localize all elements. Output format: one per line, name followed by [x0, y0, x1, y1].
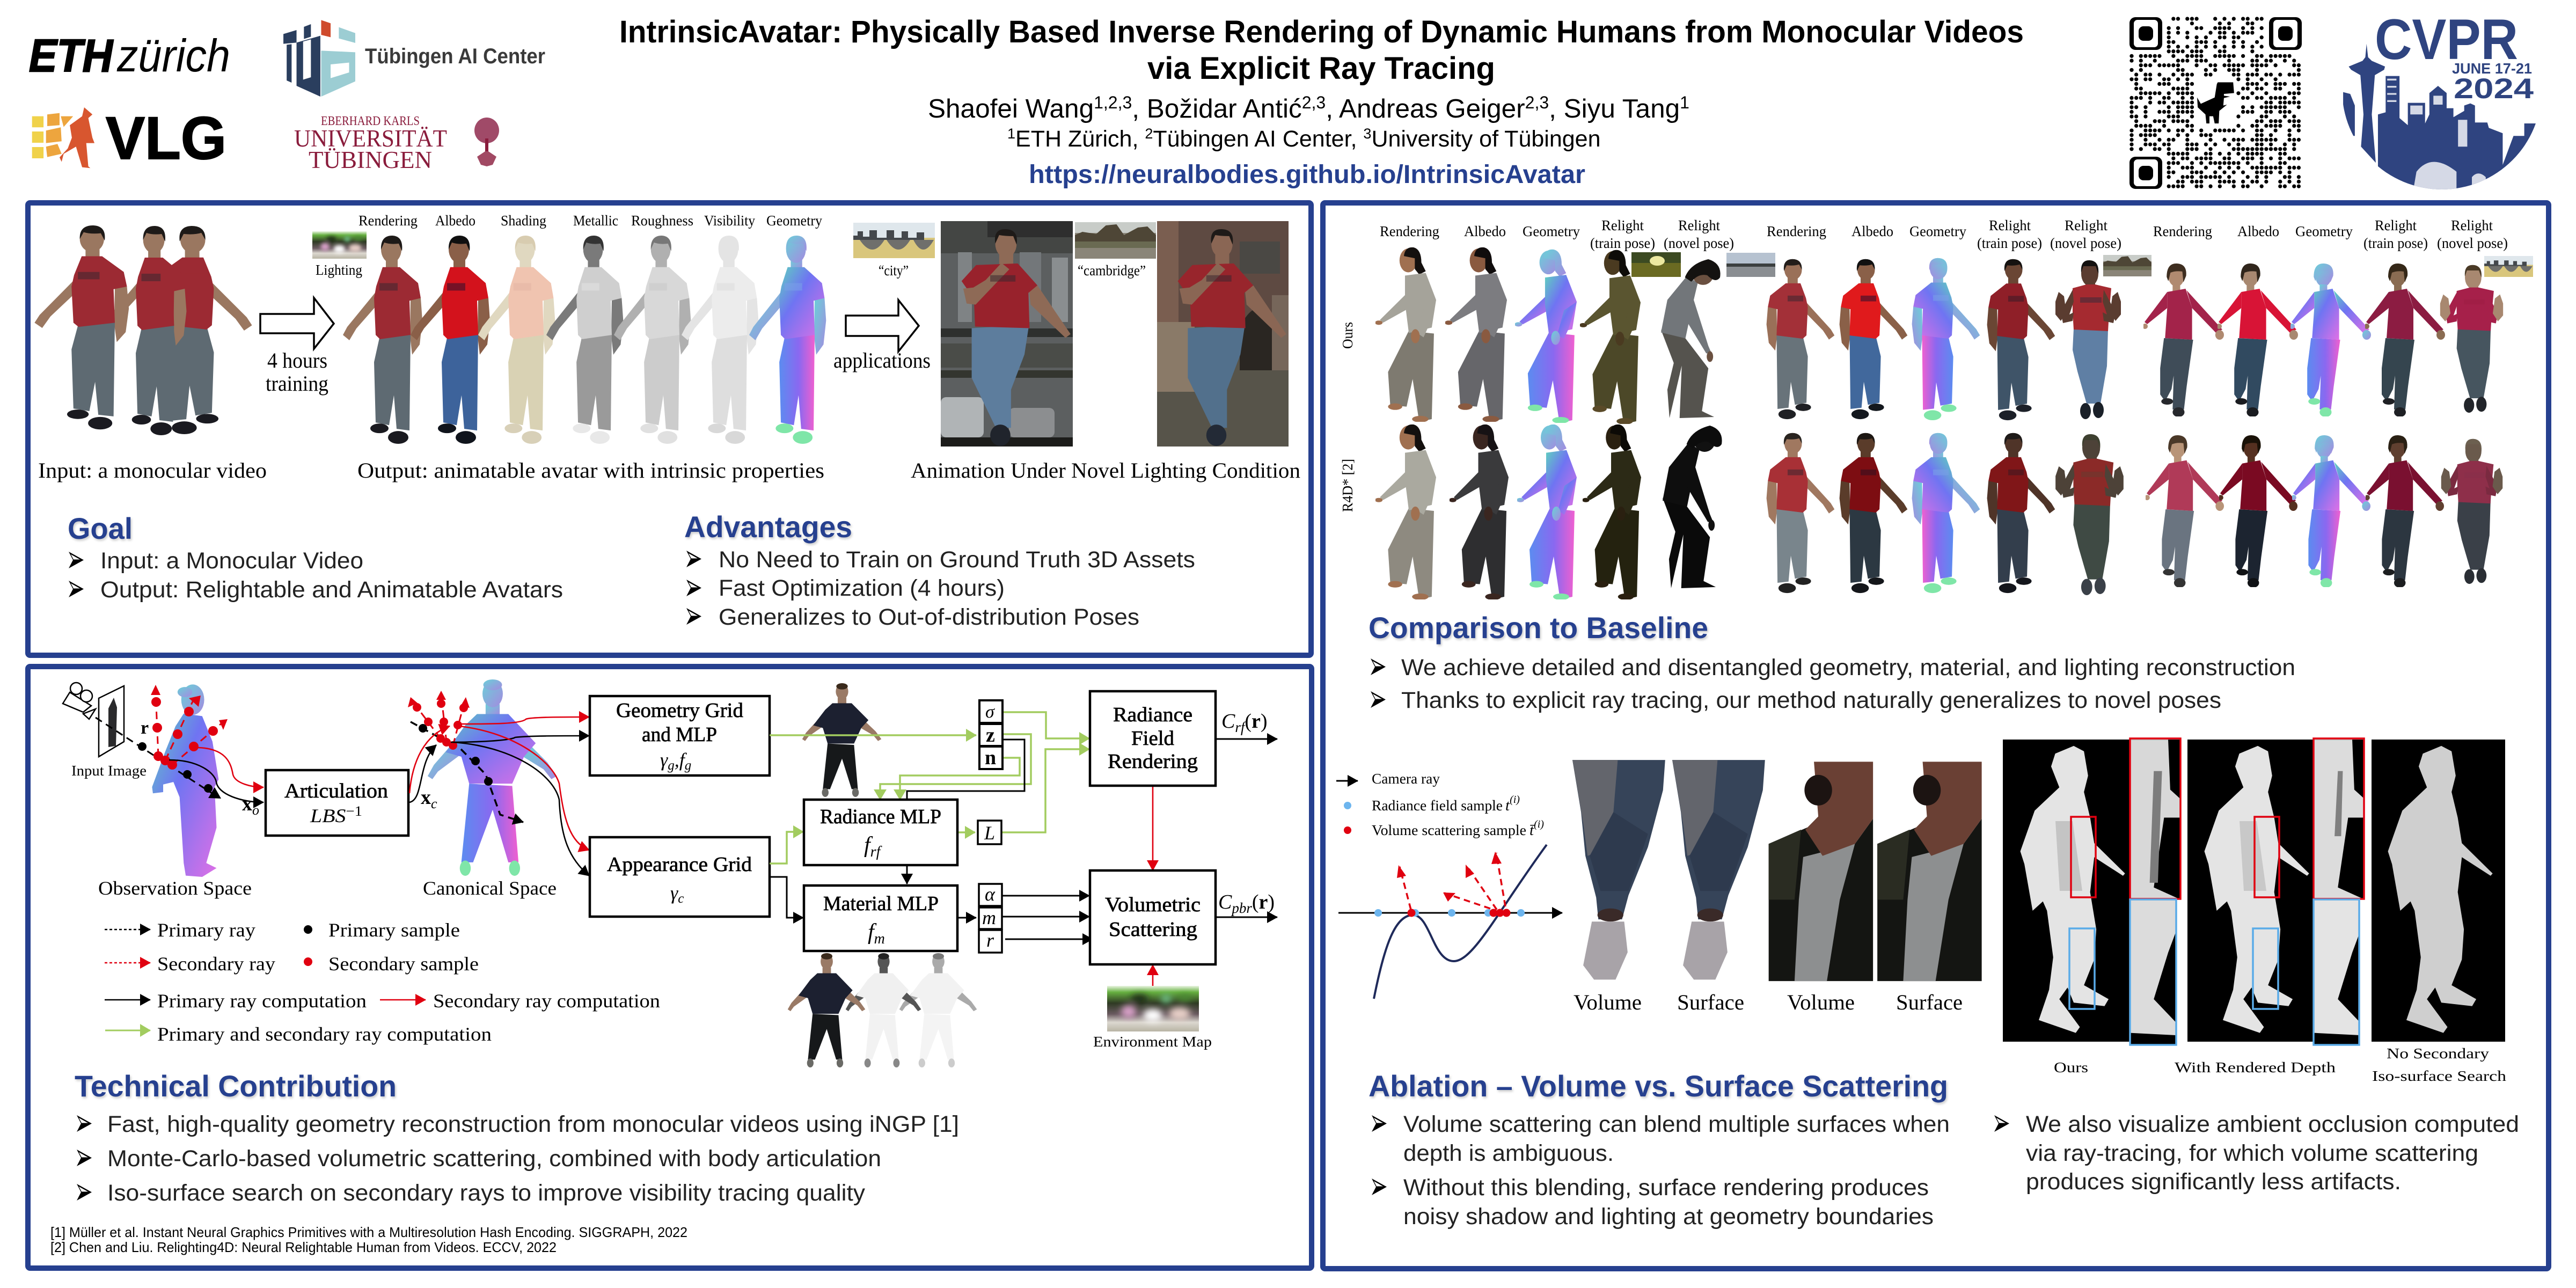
panel: comparison and ablation	[1323, 203, 2549, 1269]
box: geometry grid: Geometry Grid	[616, 699, 743, 722]
comparison column labels: (novel pose)	[1664, 235, 1734, 251]
output symbols: alpha m r	[979, 883, 1002, 953]
box: volumetric scattering	[1090, 870, 1216, 964]
ambient occlusion labels: No Secondary	[2387, 1045, 2490, 1062]
comparison column labels: Albedo	[2237, 223, 2279, 239]
comparison row 1: woman	[1375, 247, 1721, 425]
env map: cambridge small	[2103, 255, 2151, 276]
ambient occlusion labels: Iso-surface Search	[2372, 1068, 2507, 1084]
r label: r	[141, 718, 149, 738]
title	[619, 14, 2024, 86]
x_o label: x	[242, 793, 252, 815]
project url: https://neuralbodies.github.io/IntrinsicAvatar	[1029, 160, 1585, 189]
box: appearance grid	[590, 837, 770, 917]
lighting map: Lighting	[316, 262, 362, 278]
box: articulation	[266, 770, 408, 836]
box: radiance field rendering	[1090, 691, 1216, 786]
advantages bullets: Generalizes to Out-of-distribution Poses	[719, 604, 1139, 630]
panel: overview	[28, 203, 1311, 655]
image labels: volume surface: Surface	[1896, 990, 1963, 1014]
images: legs volume and surface	[1572, 760, 1765, 979]
environment map: Environment Map	[1093, 1034, 1212, 1050]
output label: C pbr: (	[1252, 891, 1259, 913]
comparison row 2: girl	[2145, 435, 2502, 588]
arrow: applications	[846, 300, 919, 352]
volume scattering diagram	[1338, 845, 1562, 999]
property column labels	[358, 213, 822, 229]
output symbol: L	[978, 821, 1001, 844]
affiliations: Tübingen AI Center,	[1153, 126, 1363, 152]
box: radiance mlp: f	[864, 833, 870, 858]
env maps: forest and lake	[1631, 252, 1775, 277]
technical bullets: Monte-Carlo-based volumetric scattering, combined with body articulation	[107, 1146, 881, 1172]
row label: R4D: R4D* [2]	[1340, 459, 1356, 512]
technical bullets: Iso-surface search on secondary rays to improve visibility tracing quality	[107, 1180, 866, 1206]
comparison column labels: (novel pose)	[2050, 235, 2121, 251]
logo: ETH Zurich	[29, 31, 230, 82]
box: geometry grid: ,	[675, 749, 679, 771]
comparison row 1: girl	[2142, 264, 2503, 417]
affiliations: 2	[1145, 126, 1153, 142]
goal bullets: Output: Relightable and Animatable Avatars	[100, 577, 563, 603]
box: geometry grid: and MLP	[642, 723, 717, 746]
authors: 2,3	[1302, 93, 1326, 112]
figure: geometry output	[802, 683, 881, 797]
legend: Primary ray	[157, 919, 255, 941]
input image label: Input Image	[71, 763, 147, 779]
comparison column labels: Rendering	[2153, 223, 2212, 239]
box: material mlp: f	[868, 920, 874, 945]
sampling legend: Radiance field sample	[1372, 797, 1503, 814]
box: articulation: Articulation	[284, 780, 388, 802]
output label: C pbr: r)	[1259, 891, 1275, 913]
input video figures	[34, 225, 252, 435]
property column labels: Roughness	[631, 213, 693, 229]
row label: ours: Ours	[1340, 322, 1356, 349]
observation space figure	[96, 684, 228, 877]
output symbols: alpha m r: α	[985, 883, 996, 905]
title: IntrinsicAvatar: Physically Based Inverse Rendering of Dynamic Humans from Monocular Videos	[619, 14, 2024, 49]
comparison column labels: Relight	[2375, 217, 2417, 233]
technical bullets	[77, 1111, 959, 1206]
box: material mlp	[804, 885, 957, 951]
authors: 2,3	[1525, 93, 1549, 112]
heading: goal: Goal	[68, 511, 133, 545]
photo: relit avatar cambridge	[1157, 221, 1289, 447]
output label: C rf: (	[1245, 710, 1252, 733]
legend: Secondary sample	[328, 953, 479, 975]
box: geometry grid: γ	[660, 749, 668, 771]
output label: C rf: rf	[1235, 719, 1247, 735]
comparison column labels: Geometry	[1909, 223, 1966, 239]
sampling legend: Camera ray	[1372, 771, 1440, 787]
env map: city small	[2484, 256, 2533, 277]
box: radiance mlp: rf	[870, 844, 882, 860]
logo: ETH Zurich: zürich	[116, 31, 230, 82]
box: volumetric scattering: Volumetric	[1105, 894, 1201, 916]
property column labels: Geometry	[766, 213, 822, 229]
ablation bullets right: We also visualize ambient occlusion computed	[2026, 1111, 2519, 1137]
output label: C pbr: pbr	[1231, 900, 1252, 916]
logo: VLG	[32, 105, 226, 172]
output label: C rf: r)	[1252, 710, 1268, 733]
green and black connector lines	[770, 712, 1277, 986]
ablation bullets right: produces significantly less artifacts.	[2026, 1169, 2401, 1195]
property column labels: Visibility	[704, 213, 755, 229]
box: material mlp: Material MLP	[823, 892, 939, 915]
image labels: volume surface: Volume	[1574, 990, 1642, 1014]
observation space label: Observation Space	[98, 877, 252, 899]
heading: advantages: Advantages	[684, 510, 852, 544]
lighting caption: Animation Under Novel Lighting Condition	[911, 458, 1300, 482]
comparison column labels: Relight	[1601, 217, 1644, 233]
canonical space label: Canonical Space	[423, 877, 557, 899]
material output figures	[788, 953, 977, 1067]
images: torso volume and surface	[1769, 762, 1982, 981]
image labels: volume surface: Surface	[1677, 990, 1744, 1014]
comparison column labels	[1380, 217, 2508, 251]
env map: city: “city”	[879, 262, 909, 279]
affiliations: 3	[1363, 126, 1371, 142]
training label: 4 hours	[267, 348, 327, 372]
property column labels: Shading	[501, 213, 546, 229]
logo: ETH Zurich: ETH	[29, 31, 113, 82]
comparison column labels: Rendering	[1380, 223, 1439, 239]
image labels: volume surface	[1574, 990, 1963, 1014]
box: articulation: −1	[346, 803, 362, 819]
logo: University of Tubingen: EBERHARD KARLS	[321, 114, 420, 128]
box: radiance mlp	[804, 800, 957, 865]
box: appearance grid: Appearance Grid	[607, 853, 752, 876]
authors: , Božidar Antić	[1132, 94, 1302, 123]
property column labels: Albedo	[435, 213, 475, 229]
box: appearance grid: c	[678, 891, 684, 906]
comparison column labels: Rendering	[1767, 223, 1826, 239]
env map: cambridge	[1075, 222, 1156, 279]
property column labels: Rendering	[358, 213, 418, 229]
logo: CVPR 2024: JUNE 17-21	[2452, 60, 2532, 77]
output label: C rf: C	[1221, 710, 1235, 733]
ablation bullets right: via ray-tracing, for which volume scattering	[2026, 1140, 2478, 1166]
logo: CVPR 2024: 2024	[2454, 73, 2534, 105]
applications label: applications	[833, 348, 931, 372]
ablation bullets left: noisy shadow and lighting at geometry boundaries	[1403, 1204, 1934, 1230]
logo: VLG: VLG	[106, 105, 226, 172]
logo: University of Tubingen	[294, 114, 499, 173]
panel: technical contribution	[28, 667, 1312, 1268]
comparison column labels: Relight	[1678, 217, 1720, 233]
heading: ablation: Ablation – Volume vs. Surface Scattering	[1368, 1069, 1948, 1103]
box: geometry grid: f	[679, 749, 685, 771]
training label: training	[266, 371, 328, 396]
box: geometry grid: g	[668, 758, 675, 773]
sampling legend: t	[1505, 797, 1510, 814]
box: geometry grid	[590, 696, 770, 775]
x_c label: x	[421, 786, 431, 809]
legend: Secondary ray	[157, 953, 275, 975]
image labels: volume surface: Volume	[1787, 990, 1855, 1014]
ambient occlusion panel: with rendered depth	[2187, 738, 2365, 1045]
logo: University of Tubingen: TÜBINGEN	[309, 147, 432, 173]
box: volumetric scattering: Scattering	[1109, 918, 1197, 941]
logo: Tubingen AI Center: Tübingen AI Center	[365, 45, 545, 68]
affiliations: University of Tübingen	[1371, 126, 1600, 152]
comparison column labels: Relight	[2451, 217, 2493, 233]
authors: 1	[1680, 93, 1689, 112]
comparison column labels: (novel pose)	[2437, 235, 2508, 251]
sampling legend: (i)	[1510, 794, 1520, 806]
comparison bullets: Thanks to explicit ray tracing, our method naturally generalizes to novel poses	[1401, 687, 2221, 713]
canonical space figure	[408, 679, 557, 876]
camera and input image icon	[63, 683, 124, 757]
ablation bullets right	[1994, 1111, 2519, 1195]
lighting map	[312, 231, 367, 278]
heading: comparison to baseline: Comparison to Baseline	[1368, 611, 1708, 645]
logo: Tubingen AI Center	[283, 20, 545, 97]
photo: relit avatar city	[941, 221, 1073, 447]
env map: cambridge: “cambridge”	[1078, 262, 1146, 279]
property column labels: Metallic	[573, 213, 618, 229]
box: articulation: LBS	[310, 805, 342, 826]
output symbols: sigma z n: z	[986, 724, 995, 747]
arrow: training	[260, 298, 334, 349]
box: appearance grid: γ	[670, 882, 678, 904]
env map: city	[853, 223, 935, 279]
x_o label: o	[252, 802, 259, 818]
ambient occlusion labels: With Rendered Depth	[2175, 1059, 2336, 1075]
logo: CVPR 2024: CVPR	[2375, 7, 2518, 71]
comparison column labels: Relight	[2065, 217, 2107, 233]
output symbols: sigma z n	[979, 700, 1002, 769]
authors: , Siyu Tang	[1549, 94, 1680, 123]
comparison bullets	[1371, 655, 2295, 713]
title: via Explicit Ray Tracing	[1147, 51, 1495, 86]
comparison row 2: woman	[1375, 425, 1722, 600]
ambient occlusion panel: no secondary iso-surface search	[2372, 740, 2505, 1042]
comparison column labels: Geometry	[2295, 223, 2353, 239]
ambient occlusion labels	[2054, 1045, 2507, 1084]
output symbol: L: L	[984, 822, 995, 844]
output symbols: alpha m r: m	[982, 907, 996, 928]
authors: Shaofei Wang	[928, 94, 1094, 123]
output symbols: alpha m r: r	[986, 930, 994, 951]
comparison column labels: Relight	[1989, 217, 2031, 233]
ablation bullets left: Volume scattering can blend multiple surfaces when	[1403, 1111, 1950, 1137]
references: [1] Müller et al. Instant Neural Graphics Primitives with a Multiresolution Hash Encoding. SIGGRAPH, 2022	[50, 1224, 687, 1240]
comparison column labels: (train pose)	[1977, 235, 2042, 251]
ambient occlusion labels: Ours	[2054, 1059, 2088, 1075]
logo: University of Tubingen: UNIVERSITÄT	[294, 125, 447, 152]
comparison column labels: (train pose)	[2363, 235, 2428, 251]
output symbols: sigma z n: σ	[985, 702, 995, 722]
output symbols: sigma z n: n	[985, 747, 996, 769]
comparison column labels: Albedo	[1464, 223, 1506, 239]
training label	[266, 348, 328, 396]
heading: technical contribution: Technical Contribution	[75, 1069, 397, 1103]
box: material mlp: m	[874, 931, 885, 947]
advantages bullets: No Need to Train on Ground Truth 3D Assets	[719, 547, 1195, 573]
box: radiance field rendering: Rendering	[1108, 750, 1198, 773]
affiliations: 1	[1007, 126, 1015, 142]
legend	[105, 919, 660, 1045]
comparison column labels: Geometry	[1523, 223, 1580, 239]
goal bullets	[69, 548, 563, 603]
qr code	[2129, 17, 2302, 189]
legend: Primary sample	[328, 919, 460, 941]
logo: CVPR 2024	[2343, 7, 2542, 189]
technical bullets: Fast, high-quality geometry reconstruction from monocular videos using iNGP [1]	[107, 1111, 959, 1137]
comparison row 2: man	[1767, 433, 2124, 595]
sampling legend: (i)	[1534, 818, 1544, 830]
legend: Secondary ray computation	[433, 990, 660, 1012]
intrinsic property figures	[343, 236, 826, 444]
ablation bullets left: Without this blending, surface rendering produces	[1403, 1175, 1929, 1201]
curves from articulation and canonical space	[409, 717, 589, 876]
sampling legend	[1336, 771, 1544, 839]
authors: , Andreas Geiger	[1326, 94, 1525, 123]
ablation bullets left: depth is ambiguous.	[1403, 1140, 1614, 1166]
x_c label: c	[431, 796, 437, 811]
input caption: Input: a monocular video	[38, 458, 267, 482]
advantages bullets	[686, 547, 1195, 630]
output caption: Output: animatable avatar with intrinsic properties	[357, 458, 824, 482]
goal bullets: Input: a Monocular Video	[100, 548, 363, 574]
comparison column labels: Albedo	[1851, 223, 1893, 239]
box: radiance field rendering: Radiance	[1113, 704, 1192, 726]
output label: C pbr: C	[1218, 891, 1232, 913]
references	[50, 1224, 687, 1255]
references: [2] Chen and Liu. Relighting4D: Neural Relightable Human from Videos. ECCV, 2022	[50, 1239, 557, 1255]
sampling legend: Volume scattering sample	[1372, 822, 1526, 838]
affiliations: ETH Zürich,	[1015, 126, 1145, 152]
box: geometry grid: g	[685, 758, 691, 773]
box: radiance field rendering: Field	[1131, 727, 1174, 750]
comparison column labels: (train pose)	[1590, 235, 1655, 251]
ambient occlusion panel: ours	[2003, 738, 2180, 1045]
legend: Primary ray computation	[157, 990, 367, 1012]
ablation bullets left	[1372, 1111, 1950, 1230]
box: radiance mlp: Radiance MLP	[820, 806, 941, 828]
advantages bullets: Fast Optimization (4 hours)	[719, 575, 1005, 601]
comparison bullets: We achieve detailed and disentangled geometry, material, and lighting reconstruction	[1401, 655, 2295, 680]
environment map	[1093, 986, 1212, 1050]
comparison row 1: man	[1767, 258, 2121, 420]
sampling legend: t̄	[1529, 822, 1534, 839]
curves to articulation	[169, 748, 264, 802]
authors: 1,2,3	[1094, 93, 1132, 112]
legend: Primary and secondary ray computation	[157, 1023, 492, 1045]
